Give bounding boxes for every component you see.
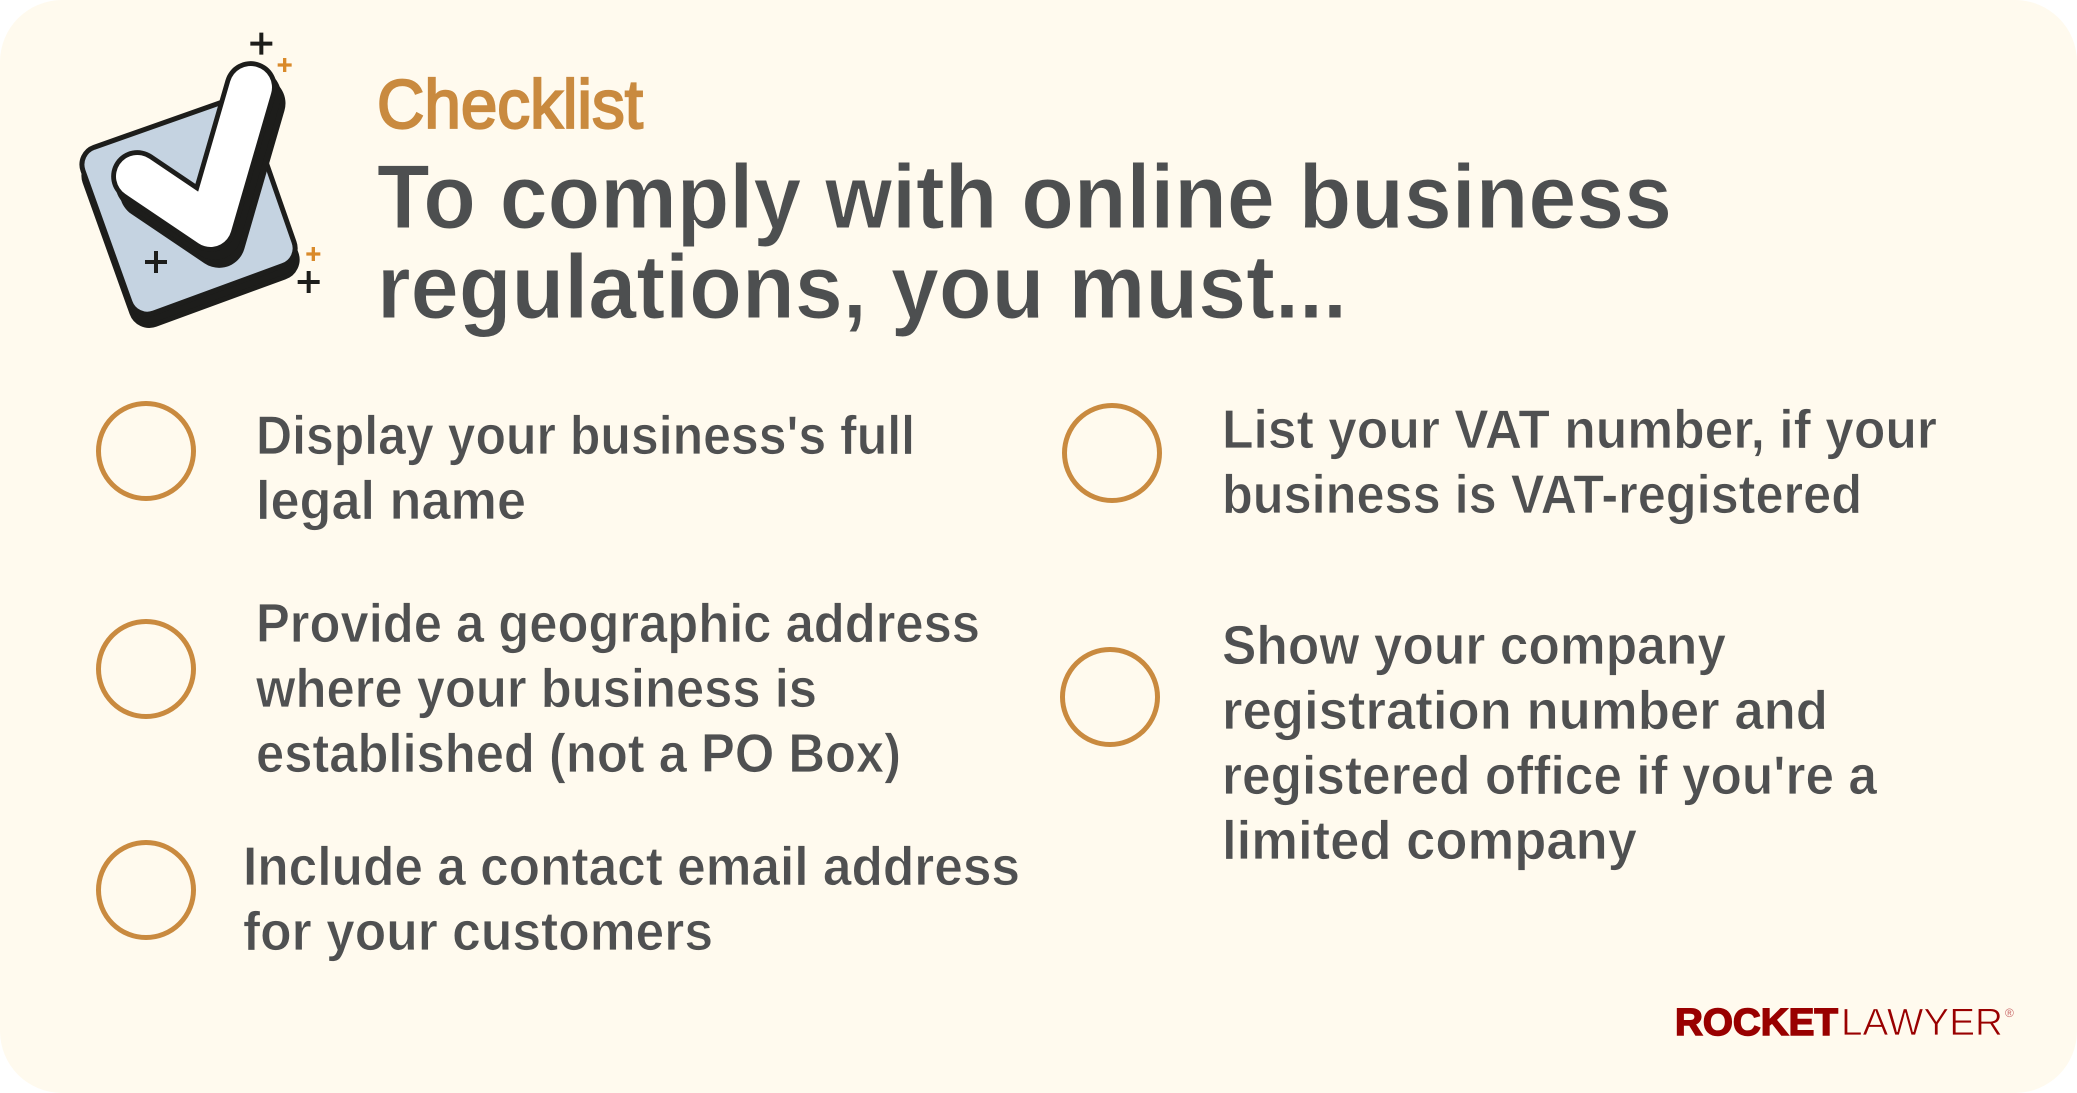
- checklist item: VAT number: List your VAT number, if your: [1222, 398, 1937, 460]
- checklist item: legal name: legal name: [256, 469, 526, 531]
- checklist item: company registration: [1062, 614, 1877, 871]
- checklist item: company registration: limited company: [1222, 809, 1637, 871]
- checklist item: contact email: for your customers: [243, 900, 713, 962]
- checklist item: geographic address: [98, 592, 980, 784]
- checklist item: geographic address: Provide a geographic address: [256, 592, 980, 654]
- checklist item: company registration: Show your company: [1222, 614, 1726, 676]
- checklist item: contact email: [98, 835, 1020, 962]
- eyebrow: Checklist: Checklist: [377, 66, 643, 143]
- checklist item: contact email: Include a contact email address: [243, 835, 1020, 897]
- checklist item: geographic address: established (not a PO Box): [256, 722, 901, 784]
- checklist item: legal name: Display your business's full: [256, 404, 915, 466]
- logo: Rocket Lawyer: ®: [2005, 1006, 2014, 1020]
- title: [377, 147, 1672, 338]
- logo: Rocket Lawyer: [1675, 1002, 2014, 1044]
- logo: Rocket Lawyer: LAWYER: [1841, 1002, 2003, 1044]
- checklist item: legal name: [98, 404, 915, 531]
- checklist item: company registration: registration number and: [1222, 679, 1828, 741]
- checklist item: company registration: registered office if you're a: [1222, 744, 1877, 806]
- title: regulations, you must...: [377, 237, 1347, 338]
- icon: checkbox with checkmark: [82, 33, 320, 325]
- logo: Rocket Lawyer: ROCKET: [1675, 1002, 1838, 1044]
- checklist item: VAT number: [1064, 398, 1937, 525]
- checklist item: VAT number: business is VAT-registered: [1222, 463, 1862, 525]
- title: To comply with online business: [377, 147, 1672, 248]
- checklist item: geographic address: where your business is: [255, 657, 817, 719]
